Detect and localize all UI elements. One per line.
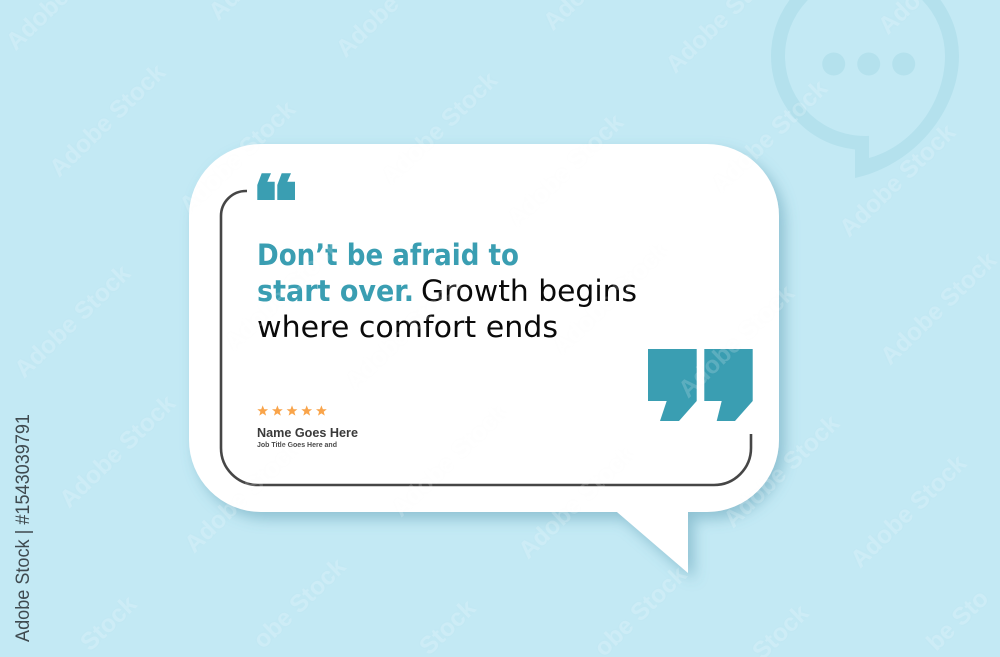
job title: Job Title Goes Here and bbox=[257, 440, 337, 449]
watermarks: Adobe Stock bbox=[876, 247, 1000, 370]
quote text: start over. bbox=[257, 274, 414, 308]
watermarks: Adobe Stock bbox=[503, 109, 629, 232]
watermarks: obe Stock bbox=[248, 553, 352, 654]
icon: closing quote mark bbox=[648, 349, 753, 421]
watermarks: Adobe Stock bbox=[674, 280, 800, 403]
quote text: Growth begins bbox=[421, 274, 637, 308]
watermarks: Adobe Stock bbox=[180, 435, 306, 558]
watermarks: Adobe Stock bbox=[548, 237, 674, 360]
quote text bbox=[257, 238, 637, 344]
icon: opening quote mark bbox=[257, 173, 295, 200]
stock id side text: Adobe Stock | #1543039791 bbox=[13, 414, 34, 642]
watermarks: Adobe Stock bbox=[10, 260, 136, 383]
star rating bbox=[257, 405, 327, 416]
watermarks: Adobe Stock bbox=[377, 67, 503, 190]
watermarks: Adobe Stock bbox=[846, 450, 972, 573]
watermarks: Stock bbox=[75, 590, 142, 656]
author name: Name Goes Here bbox=[257, 425, 358, 440]
watermarks: Adobe Stock bbox=[220, 233, 346, 356]
watermarks: Adobe Stock bbox=[341, 272, 467, 395]
icon: background chat bubble bbox=[771, 0, 959, 178]
quote text: Don’t be afraid to bbox=[257, 238, 519, 272]
watermarks: be Sto bbox=[921, 585, 994, 656]
watermarks: Adobe Stock bbox=[835, 119, 961, 242]
watermarks: Adobe Stock bbox=[45, 59, 171, 182]
watermarks: Adobe Stock bbox=[387, 399, 513, 522]
watermarks: Adobe Stock bbox=[55, 390, 181, 513]
watermarks: Adobe Stock bbox=[514, 441, 640, 564]
speech bubble bbox=[189, 144, 779, 573]
quote text: where comfort ends bbox=[257, 310, 558, 344]
watermarks: Adobe Stock bbox=[707, 75, 833, 198]
watermarks: Adobe Stock bbox=[719, 410, 845, 533]
frame line bbox=[221, 191, 751, 485]
watermarks: Adobe Stock bbox=[175, 96, 301, 219]
